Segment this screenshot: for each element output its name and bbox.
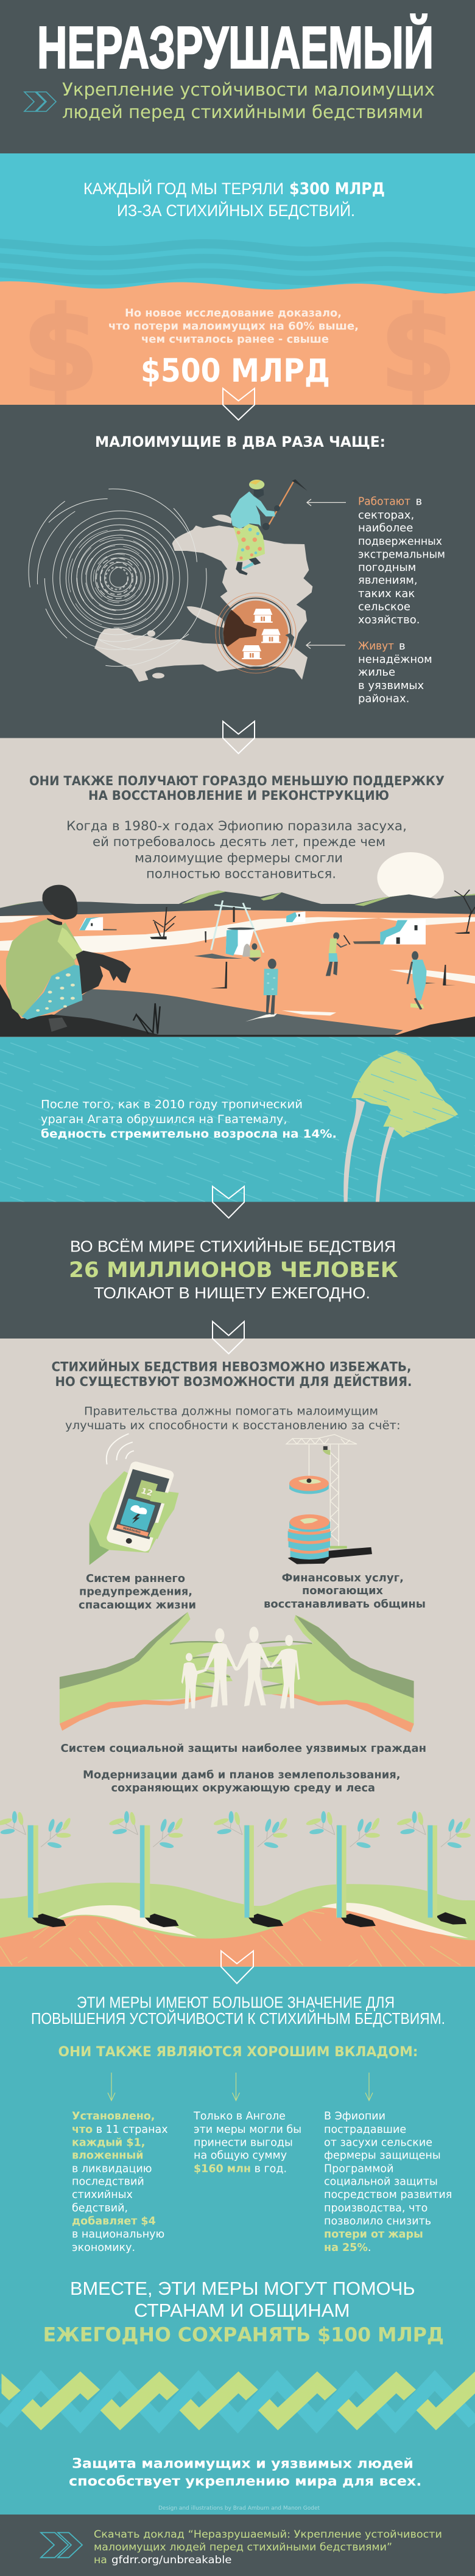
text: works in sectors <box>358 495 445 626</box>
text: column 1: вложенный <box>72 2150 143 2162</box>
text: early warning systems <box>79 1572 196 1611</box>
icon: farmer with hoe <box>230 479 308 575</box>
icon: crane and coins <box>286 1435 372 1564</box>
text: dams and land-use: сохраняющих окружающую среду и леса <box>111 1782 375 1794</box>
text: lives in housing: ненадёжном <box>358 653 432 666</box>
text: column 1: каждый $1, <box>72 2137 145 2149</box>
text: Hurricane Agatha: бедность стремительно возросла на 14%. <box>41 1128 337 1141</box>
text: measures matter: ЭТИ МЕРЫ ИМЕЮТ БОЛЬШОЕ ЗНАЧЕНИЕ ДЛЯ <box>77 1993 395 2012</box>
text: works in sectors: в <box>415 495 422 508</box>
panel: footer <box>0 2515 475 2576</box>
text: together: ЕЖЕГОДНО СОХРАНЯТЬ $100 МЛРД <box>43 2323 444 2346</box>
text: column 3: позволило снизить <box>324 2216 431 2228</box>
text: new study <box>108 307 359 346</box>
heading: can't avoid <box>51 1359 412 1389</box>
text: works in sectors: погодным <box>358 561 416 574</box>
text: column 1: что в 11 странах <box>72 2124 168 2136</box>
text: column 2: на общую сумму <box>194 2150 287 2162</box>
panel: 26 million <box>0 1202 475 1339</box>
text: column 3: потери от жары <box>324 2228 423 2241</box>
subtitle: Укрепление устойчивости малоимущих <box>62 79 435 100</box>
text: column 1: последствий <box>72 2176 144 2188</box>
text: governments: Правительства должны помогать малоимущим <box>84 1405 378 1418</box>
text: column 3 <box>324 2110 452 2254</box>
decoration: check pattern <box>1 2371 475 2431</box>
illustration: drought scene <box>0 852 475 1037</box>
panel: twice as often <box>0 405 475 738</box>
text: Ethiopia drought: малоимущие фермеры смогли <box>135 851 343 866</box>
text: column 2: эти меры могли бы <box>194 2124 301 2136</box>
text: measures matter <box>31 1993 445 2028</box>
text: Ethiopia drought: ей потребовалось десять лет, прежде чем <box>93 835 385 849</box>
icon: protecting hands and family <box>60 1612 414 1732</box>
heading: can't avoid: НО СУЩЕСТВУЮТ ВОЗМОЖНОСТИ ДЛЯ ДЕЙСТВИЯ. <box>55 1374 412 1389</box>
heading: less support: ОНИ ТАКЖЕ ПОЛУЧАЮТ ГОРАЗДО МЕНЬШУЮ ПОДДЕРЖКУ <box>29 774 445 788</box>
heading: can't avoid: СТИХИЙНЫХ БЕДСТВИЯ НЕВОЗМОЖНО ИЗБЕЖАТЬ, <box>51 1359 412 1374</box>
text: column 3: социальной защиты <box>324 2176 438 2188</box>
text: 26 million people: ВО ВСЁМ МИРЕ СТИХИЙНЫЕ БЕДСТВИЯ <box>70 1237 396 1256</box>
text: new study: что потери малоимущих на 60% выше, <box>108 320 359 332</box>
text: column 1 <box>72 2110 168 2254</box>
text: column 1: в национальную <box>72 2228 164 2241</box>
text: column 2: принести выгоды <box>194 2137 293 2149</box>
illustration: palm trunks <box>343 1099 395 1202</box>
text: works in sectors: хозяйство. <box>358 614 420 626</box>
text: lives in housing: жилье <box>358 666 395 679</box>
text: column 3: на 25%. <box>324 2242 371 2254</box>
panel: investment <box>0 1967 475 2515</box>
text: download <box>94 2529 442 2566</box>
text: governments: улучшать их способности к восстановлению за счёт: <box>65 1419 401 1432</box>
text: financial services <box>264 1572 426 1611</box>
text: new study: Но новое исследование доказало, <box>125 307 342 320</box>
text: 500 billion: $500 МЛРД <box>141 352 330 390</box>
text: lives in housing: в <box>399 640 406 653</box>
text: column 3: Программой <box>324 2163 393 2175</box>
subtitle: людей перед стихийными бедствиями <box>62 102 423 122</box>
text: works in sectors: секторах, <box>358 509 414 522</box>
text: Ethiopia drought: Когда в 1980-х годах Эфиопию поразила засуха, <box>66 819 407 833</box>
text: conclusion: Защита малоимущих и уязвимых людей <box>72 2457 413 2472</box>
text: works in sectors: экстремальным <box>358 548 445 561</box>
text: conclusion <box>69 2457 421 2490</box>
text: financial services: восстанавливать общины <box>264 1598 426 1611</box>
text: column 3: посредством развития <box>324 2189 452 2201</box>
text: Hurricane Agatha: ураган Агата обрушился на Гватемалу, <box>41 1113 287 1126</box>
text: conclusion: способствует укреплению мира для всех. <box>69 2474 421 2490</box>
text: works in sectors: таких как <box>358 587 415 600</box>
panel: actions <box>0 1339 475 1967</box>
text: column 1: Установлено, <box>72 2110 155 2123</box>
text: together: СТРАНАМ И ОБЩИНАМ <box>134 2300 350 2321</box>
text: annual losses: КАЖДЫЙ ГОД МЫ ТЕРЯЛИ <box>83 180 284 198</box>
text: credits: Design and illustrations by Brad Amburn and Manon Godet <box>158 2505 320 2511</box>
text: column 2: Только в Анголе <box>193 2110 286 2123</box>
text: column 2: $160 млн в год. <box>194 2163 287 2175</box>
illustration: palm crown <box>351 1051 458 1138</box>
panel: sand background <box>0 281 475 405</box>
text: financial services: помогающих <box>302 1584 384 1597</box>
text: 26 million people: 26 МИЛЛИОНОВ ЧЕЛОВЕК <box>69 1258 398 1283</box>
map: Haiti <box>94 514 312 682</box>
text: works in sectors: явлениям, <box>358 574 418 587</box>
text: Hurricane Agatha: После того, как в 2010 году тропический <box>41 1098 303 1111</box>
text: lives in housing: в уязвимых <box>358 679 424 692</box>
panel: storm <box>0 1037 475 1202</box>
text: download: gfdrr.org/unbreakable <box>111 2554 231 2566</box>
icon: header double chevron <box>24 92 56 111</box>
icon: phone warning: WARNING <box>122 1527 141 1535</box>
icon: dollar right: $ <box>380 282 456 417</box>
decoration: rain <box>0 1037 475 1202</box>
panel: losses water <box>0 153 475 293</box>
text: dams and land-use: Модернизации дамб и планов землепользования, <box>83 1768 401 1781</box>
text: column 3: пострадавшие <box>324 2124 406 2136</box>
text: social protection: Систем социальной защиты наиболее уязвимых граждан <box>61 1742 426 1755</box>
text: column 1: экономику. <box>72 2242 135 2254</box>
arrow: chevron 5 <box>221 1951 253 1983</box>
arrow: column 1 <box>108 2073 115 2101</box>
subtitle <box>62 79 435 122</box>
text: column 2 <box>193 2110 301 2175</box>
heading: good investment: ОНИ ТАКЖЕ ЯВЛЯЮТСЯ ХОРОШИМ ВКЛАДОМ: <box>58 2045 418 2060</box>
text: early warning systems: спасающих жизни <box>79 1598 196 1611</box>
icon: dollar left: $ <box>23 282 99 417</box>
decoration: waves <box>0 243 475 282</box>
text: new study: чем считалось ранее - свыше <box>141 333 329 346</box>
arrow: chevron 3 <box>213 1186 244 1218</box>
icon: cyclone spiral <box>29 489 206 667</box>
text: column 1: в ликвидацию <box>72 2163 152 2175</box>
icon: phone warning: 12 <box>139 1487 153 1498</box>
text: together <box>43 2278 444 2346</box>
text: Ethiopia drought <box>66 819 407 881</box>
text: download: на <box>94 2554 107 2566</box>
text: column 3: В Эфиопии <box>324 2110 385 2123</box>
text: column 3: производства, что <box>324 2202 427 2214</box>
text: column 1: добавляет $4 <box>72 2216 156 2228</box>
arrow: chevron 1 <box>223 388 255 420</box>
text: works in sectors: сельское <box>358 601 410 614</box>
text: 26 million people <box>69 1237 398 1302</box>
arrow: column 3 <box>365 2073 373 2101</box>
text: lives in housing: районах. <box>358 693 409 705</box>
icon: vulnerable houses circle <box>216 593 296 673</box>
illustration: forest and dam <box>0 1811 475 1967</box>
text: column 1: бедствий, <box>72 2202 128 2214</box>
text: early warning systems: Систем раннего <box>86 1572 185 1585</box>
text: together: ВМЕСТЕ, ЭТИ МЕРЫ МОГУТ ПОМОЧЬ <box>70 2278 415 2299</box>
text: annual losses: ИЗ-ЗА СТИХИЙНЫХ БЕДСТВИЙ. <box>117 201 355 220</box>
arrow: column 2 <box>233 2073 240 2101</box>
text: 26 million people: ТОЛКАЮТ В НИЩЕТУ ЕЖЕГОДНО. <box>94 1284 370 1302</box>
text: works in sectors: наиболее <box>358 522 413 534</box>
text: Ethiopia drought: полностью восстановиться. <box>146 866 336 881</box>
text: annual losses <box>83 180 385 220</box>
text: financial services: Финансовых услуг, <box>282 1572 404 1584</box>
text: download: Скачать доклад “Неразрушаемый: Укрепление устойчивости <box>94 2529 442 2541</box>
text: dams and land-use <box>83 1768 401 1794</box>
text: works in sectors: подверженных <box>358 535 442 548</box>
icon: phone warning <box>90 1433 179 1565</box>
icon: footer chevrons <box>41 2533 82 2558</box>
text: column 1: стихийных <box>72 2189 133 2201</box>
text: works in sectors: Работают <box>358 495 410 508</box>
arrow: housing <box>306 642 345 649</box>
panel: header background <box>0 0 475 153</box>
panel: recovery <box>0 738 475 1037</box>
arrow: chevron 2 <box>223 721 255 754</box>
text: annual losses: $300 МЛРД <box>289 180 385 198</box>
text: lives in housing <box>358 640 432 705</box>
heading: less support: НА ВОССТАНОВЛЕНИЕ И РЕКОНСТРУКЦИЮ <box>88 788 389 803</box>
text: download: малоимущих людей перед стихийными бедствиями” <box>94 2541 392 2553</box>
text: Hurricane Agatha <box>41 1098 337 1141</box>
arrow: work sectors <box>307 499 346 506</box>
text: column 3: от засухи сельские <box>324 2137 432 2149</box>
text: column 3: фермеры защищены <box>324 2150 441 2162</box>
text: governments <box>65 1405 401 1432</box>
text: early warning systems: предупреждения, <box>79 1585 192 1598</box>
heading: less support <box>29 774 445 803</box>
heading: twice as often: МАЛОИМУЩИЕ В ДВА РАЗА ЧАЩЕ: <box>95 433 385 450</box>
arrow: chevron 4 <box>213 1321 244 1354</box>
text: lives in housing: Живут <box>358 640 394 653</box>
